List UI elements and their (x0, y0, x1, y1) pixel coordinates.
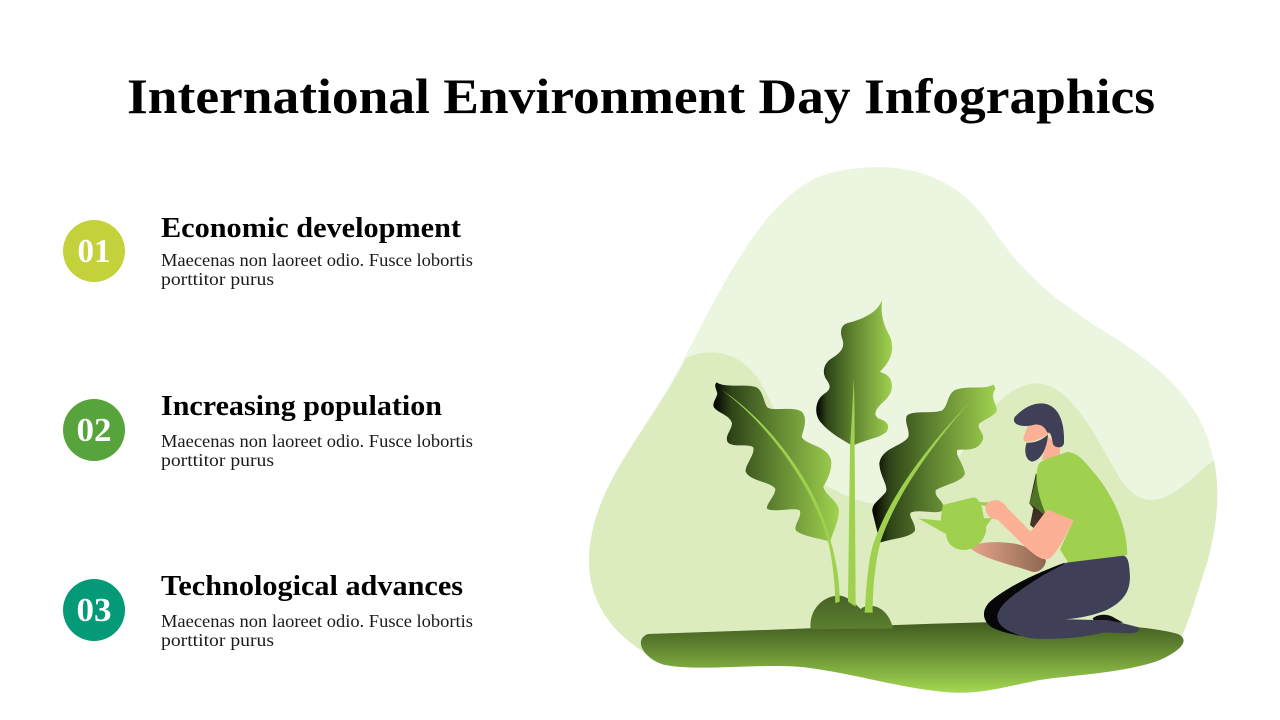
background blob light (589, 167, 1214, 660)
hand (985, 501, 1006, 519)
back leg shadow (984, 563, 1065, 636)
title: International Environment Day Infographics (127, 68, 1155, 124)
ground (641, 622, 1184, 693)
panel: technological advances (63, 570, 473, 650)
beard (1025, 435, 1048, 462)
panel: increasing population (63, 390, 473, 470)
number badge 03 (63, 579, 125, 641)
leaf: center (816, 299, 892, 446)
watering can (918, 497, 992, 550)
face (1023, 422, 1049, 442)
number badge 02 (63, 399, 125, 461)
back forearm (972, 542, 1046, 572)
trousers (997, 556, 1139, 639)
panel: economic development (63, 212, 473, 289)
shirt sleeve shadow (1029, 473, 1046, 516)
heading: economic development: Economic development (161, 212, 461, 244)
text block: economic development: Maecenas non laoreet odio. Fusce lobortis (161, 250, 473, 270)
number badge 01: 01 (78, 233, 110, 270)
leaf: right (872, 384, 997, 543)
front arm (987, 500, 1074, 559)
number badge 02: 02 (76, 412, 112, 449)
stem: right (865, 402, 970, 613)
illustration: man watering a plant (589, 167, 1217, 693)
soil mound (810, 596, 893, 629)
heading: technological advances: Technological advances (161, 570, 463, 602)
plant (713, 299, 997, 629)
text block: technological advances: Maecenas non laoreet odio. Fusce lobortis (161, 611, 473, 631)
back foot (1093, 615, 1123, 623)
text block: increasing population: Maecenas non laoreet odio. Fusce lobortis (161, 431, 473, 451)
number badge 01 (63, 220, 125, 282)
text block: economic development: porttitor purus (161, 269, 274, 289)
leaf: left (713, 382, 839, 542)
text block: technological advances: porttitor purus (161, 630, 274, 650)
stem: center (848, 378, 856, 607)
hair (1014, 403, 1064, 447)
text block: increasing population: porttitor purus (161, 450, 274, 470)
back arm shadow (1029, 473, 1050, 533)
background blob dark (589, 352, 1217, 662)
number badge 03: 03 (76, 592, 112, 629)
man (918, 403, 1139, 639)
stem: left (722, 390, 840, 603)
shirt (1037, 452, 1127, 563)
heading: increasing population: Increasing population (161, 390, 442, 422)
neck (1042, 437, 1060, 460)
